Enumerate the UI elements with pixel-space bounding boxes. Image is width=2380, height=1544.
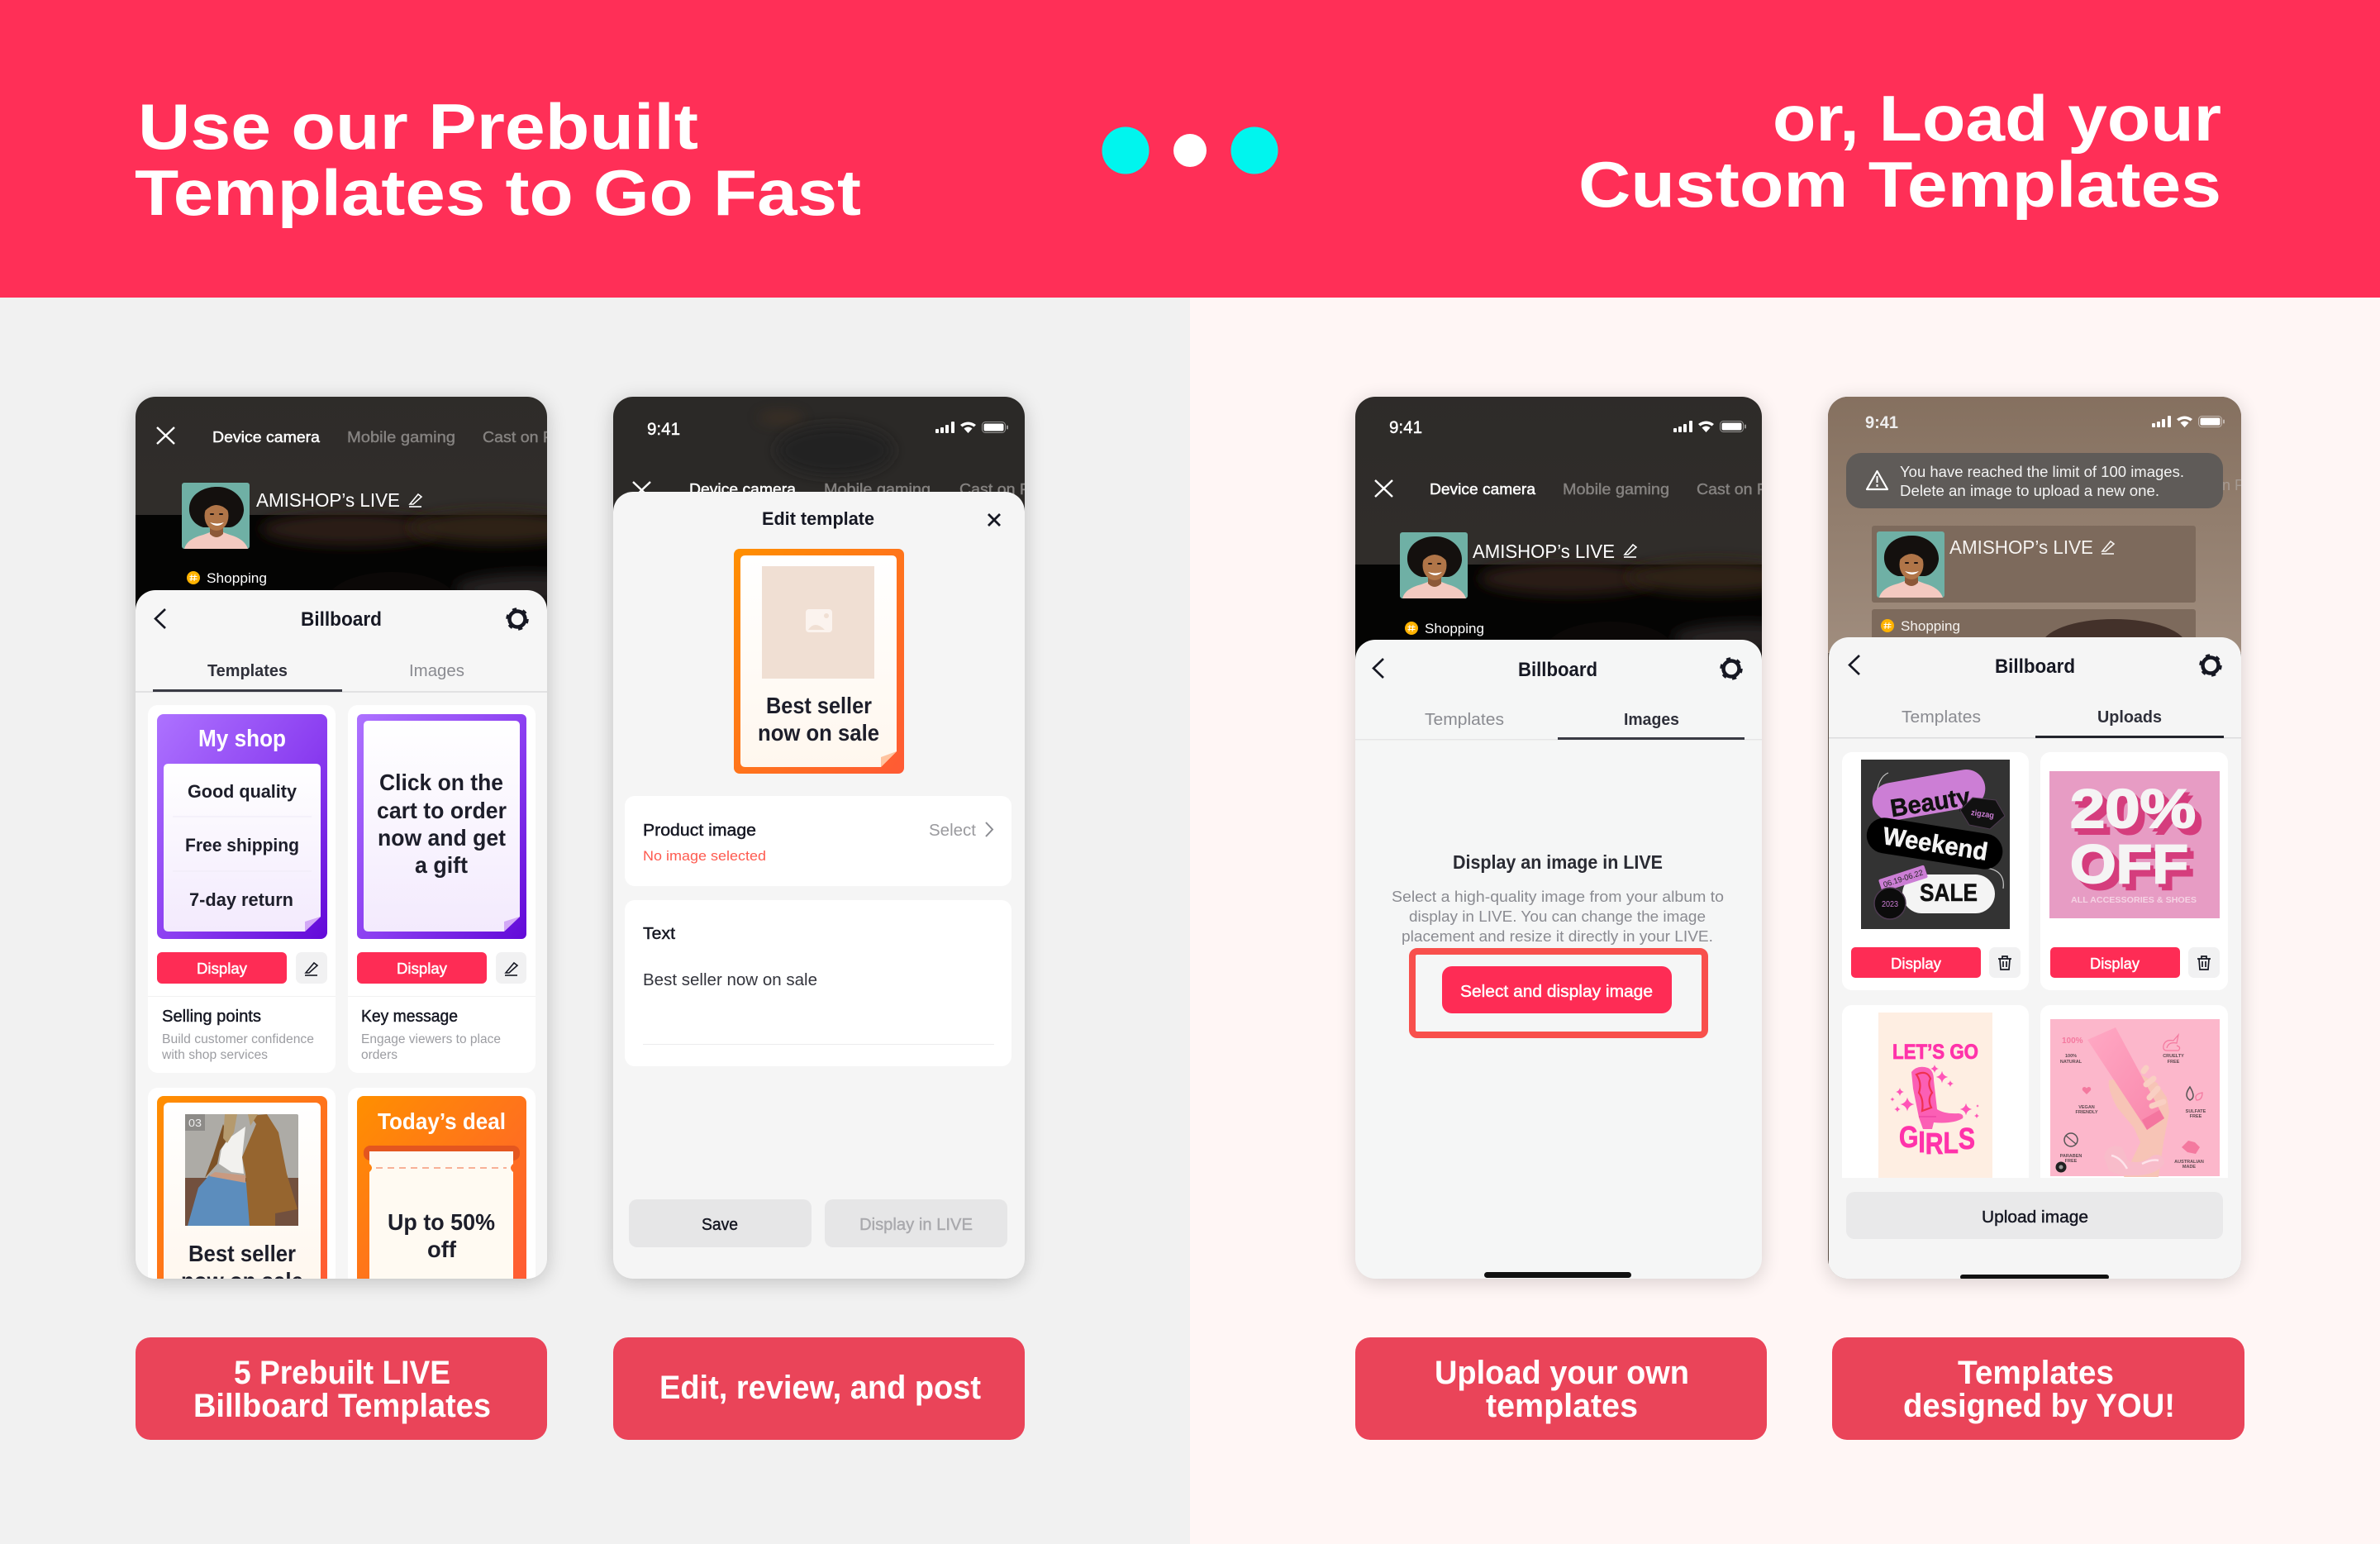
caption: 5 prebuilt live billboard templates <box>136 1337 547 1440</box>
phone screen 2: edit template: Mobile gaming <box>824 481 931 498</box>
billboard sheet: uploads tab: Uploads <box>2097 708 2162 727</box>
upload card: beauty weekend sale <box>1842 752 2029 990</box>
select and display image button: Select and display image <box>1460 983 1653 1001</box>
upload card: lets go girls: LET’S GO <box>1892 1041 1978 1064</box>
limit warning toast: You have reached the limit of 100 images. <box>1900 464 2184 480</box>
phone screen 3: upload image: AMISHOP’s LIVE <box>1473 541 1615 562</box>
left heading: Templates to Go Fast <box>135 156 861 229</box>
upload card: pink tube product: NATURAL <box>2060 1060 2082 1065</box>
upload card: 20 percent off: Display <box>2090 955 2140 972</box>
red highlight box <box>1412 951 1705 1035</box>
upload card: pink tube product: CRUELTY <box>2163 1054 2184 1059</box>
billboard sheet: uploads tab: Billboard <box>1995 655 2075 678</box>
template card: best seller: Best seller <box>188 1241 296 1266</box>
limit warning toast: Delete an image to upload a new one. <box>1900 483 2159 499</box>
left heading <box>135 90 861 229</box>
template card: todays deal: Up to 50% <box>388 1209 495 1235</box>
template card: selling points: Good quality <box>188 781 298 802</box>
phone screen 3: upload image: 9:41 <box>1389 418 1422 437</box>
template card: selling points: Build customer confidence <box>162 1032 314 1046</box>
billboard sheet: uploads tab <box>1829 637 2241 1299</box>
billboard sheet: uploads tab: Templates <box>1902 708 1981 727</box>
upload card: 20 percent off: OFF <box>2070 833 2188 894</box>
display in live button <box>825 1199 1007 1247</box>
upload card: beauty weekend sale: 2023 <box>1882 900 1898 909</box>
template card: selling points: Free shipping <box>185 835 299 855</box>
product image field: Select <box>929 822 976 840</box>
upload card: 20 percent off <box>2040 752 2228 990</box>
template card: key message: a gift <box>415 852 468 878</box>
right heading: Custom Templates <box>1578 148 2221 221</box>
upload card: pink tube product: FREE <box>2168 1060 2180 1065</box>
billboard sheet: images tab <box>1355 640 1762 1301</box>
left heading: Use our Prebuilt <box>138 90 698 163</box>
upload image button: Upload image <box>1982 1208 2088 1227</box>
phone screen 1: prebuilt templates: Device camera <box>212 429 321 446</box>
caption: templates designed by you: Templates <box>1958 1355 2114 1391</box>
billboard sheet: images tab: Templates <box>1425 711 1504 729</box>
billboard sheet: Templates <box>207 662 288 680</box>
template card: selling points: 7-day return <box>189 889 293 910</box>
phone screen 1: prebuilt templates: AMISHOP’s LIVE <box>256 489 400 511</box>
phone screen 1: prebuilt templates: Shopping <box>207 570 267 586</box>
right heading: or, Load your <box>1773 82 2221 155</box>
product image field: No image selected <box>643 848 766 864</box>
template card: key message: now and get <box>378 825 506 851</box>
caption: upload your own templates: Upload your own <box>1435 1355 1689 1391</box>
edit template sheet <box>613 492 1025 1302</box>
upload card: beauty weekend sale: zigzag <box>1970 808 1995 821</box>
upload card: beauty weekend sale: Weekend <box>1881 822 1990 866</box>
template card: selling points <box>148 705 336 1073</box>
billboard sheet <box>136 590 547 1301</box>
phone screen 4: uploads: Shopping <box>1901 618 1960 634</box>
template card: key message: Display <box>397 960 447 977</box>
caption: upload your own templates <box>1355 1337 1767 1440</box>
phone screen 3: upload image: Mobile gaming <box>1563 481 1669 498</box>
upload card: 20 percent off: 20% <box>2070 778 2196 839</box>
phone screen 3: upload image: Device camera <box>1430 481 1536 498</box>
template card: key message: cart to order <box>377 798 507 823</box>
background: left panel <box>0 0 1190 1544</box>
template preview <box>734 549 904 774</box>
phone screen 4: uploads: n P <box>2222 477 2244 493</box>
upload card: pink tube product: 100% <box>2062 1036 2083 1046</box>
text field: Best seller now on sale <box>643 971 817 989</box>
caption: templates designed by you <box>1832 1337 2244 1440</box>
text field: Text <box>643 925 675 943</box>
caption: 5 prebuilt live billboard templates: Billboard Templates <box>193 1388 491 1424</box>
edit template sheet: Edit template <box>762 508 874 529</box>
billboard sheet: images tab: Images <box>1624 711 1679 729</box>
right heading <box>1578 82 2221 221</box>
template card: best seller: now on sale <box>181 1268 303 1294</box>
phone screen 2: edit template <box>613 397 1031 1302</box>
template card: key message <box>348 705 536 1073</box>
phone screen 2: edit template: Device camera <box>689 481 797 498</box>
upload card: 20 percent off: ALL ACCESSORIES & SHOES <box>2071 895 2197 905</box>
upload card: beauty weekend sale: Beauty <box>1888 783 1973 822</box>
billboard sheet: images tab: Select a high-quality image from your album to <box>1392 888 1724 905</box>
select and display image button <box>1442 966 1672 1013</box>
upload card: pink tube product: FRIENDLY <box>2076 1110 2098 1115</box>
template card: key message: Engage viewers to place <box>361 1032 501 1046</box>
billboard sheet: images tab: placement and resize it directly in your LIVE. <box>1402 927 1713 945</box>
save button <box>629 1199 812 1247</box>
billboard sheet: images tab: Billboard <box>1518 659 1597 681</box>
upload card: beauty weekend sale: 06.19-06.22 <box>1883 869 1925 889</box>
upload card: lets go girls <box>1842 1005 2029 1195</box>
phone screen 3: upload image: Shopping <box>1425 621 1484 636</box>
template preview: now on sale <box>758 720 879 746</box>
phone screen 3: upload image: Cast on P <box>1697 481 1768 498</box>
dots icon <box>1102 127 1278 174</box>
template card: best seller: 03 <box>188 1117 202 1129</box>
upload card: pink tube product: SULFATE <box>2186 1109 2206 1114</box>
caption: templates designed by you: designed by YOU! <box>1903 1388 2175 1424</box>
phone screen 3: upload image <box>1347 392 1770 1289</box>
template card: key message: orders <box>361 1048 397 1062</box>
phone screen 4: uploads: 9:41 <box>1865 413 1898 432</box>
template card: todays deal: off <box>427 1237 457 1262</box>
template card: best seller <box>148 1088 336 1294</box>
template card: selling points: Selling points <box>162 1008 261 1026</box>
billboard sheet: Images <box>409 662 464 680</box>
upload card: pink tube product: MADE <box>2182 1165 2196 1170</box>
template card: selling points: My shop <box>198 726 286 752</box>
upload card: beauty weekend sale: SALE <box>1920 879 1978 907</box>
phone screen 1: prebuilt templates: Cast on P <box>483 429 554 446</box>
text field <box>625 900 1011 1066</box>
background: right panel <box>1190 0 2380 1544</box>
upload card: pink tube product: FREE <box>2065 1159 2078 1164</box>
upload card: 20 percent off: 20% <box>2077 784 2202 846</box>
save button: Save <box>702 1216 738 1234</box>
phone screen 4: uploads <box>1828 397 2244 1299</box>
product image field: Product image <box>643 822 756 840</box>
phone screen 1: prebuilt templates: Mobile gaming <box>347 429 455 446</box>
caption: edit, review, and post: Edit, review, and post <box>659 1370 981 1406</box>
upload card: 20 percent off: OFF <box>2073 836 2192 898</box>
billboard sheet: images tab: display in LIVE. You can change the image <box>1409 908 1706 925</box>
template card: key message: Key message <box>361 1008 458 1026</box>
caption: 5 prebuilt live billboard templates: 5 Prebuilt LIVE <box>234 1355 450 1391</box>
upload card: pink tube product: FREE <box>2190 1114 2202 1119</box>
billboard sheet: Billboard <box>301 608 382 631</box>
display in live button: Display in LIVE <box>859 1216 973 1234</box>
upload card: pink tube product: AUSTRALIAN <box>2174 1160 2204 1165</box>
template card: todays deal <box>348 1088 536 1289</box>
header banner <box>0 0 2380 298</box>
product image field <box>625 796 1011 886</box>
product photo <box>185 1114 298 1226</box>
template card: todays deal: Today’s deal <box>378 1108 506 1134</box>
upload card: pink tube product: 100% <box>2065 1054 2077 1059</box>
phone screen 4: uploads: AMISHOP’s LIVE <box>1949 536 2093 558</box>
phone screen 1: prebuilt templates <box>126 391 556 1291</box>
phone screen 2: edit template: 9:41 <box>647 420 680 439</box>
caption: edit, review, and post <box>613 1337 1025 1440</box>
upload card: 20 percent off: 20% <box>2073 781 2199 842</box>
billboard sheet: images tab: Display an image in LIVE <box>1453 851 1663 873</box>
caption: upload your own templates: templates <box>1486 1388 1638 1424</box>
upload card: beauty weekend sale: Display <box>1891 955 1941 972</box>
template card: selling points: with shop services <box>161 1048 268 1062</box>
limit warning toast <box>1846 453 2223 508</box>
upload card: lets go girls: GIRLS <box>1899 1120 1975 1160</box>
template card: selling points: Display <box>197 960 247 977</box>
upload card: pink tube product: VEGAN <box>2078 1105 2095 1110</box>
upload card: pink tube product <box>2040 1005 2228 1195</box>
template card: key message: Click on the <box>379 770 503 795</box>
upload card: 20 percent off: OFF <box>2077 840 2195 901</box>
phone screen 2: edit template: Cast on P <box>959 481 1031 498</box>
upload card: pink tube product: PARABEN <box>2060 1154 2082 1159</box>
upload image button <box>1846 1192 2223 1239</box>
template preview: Best seller <box>766 693 872 718</box>
